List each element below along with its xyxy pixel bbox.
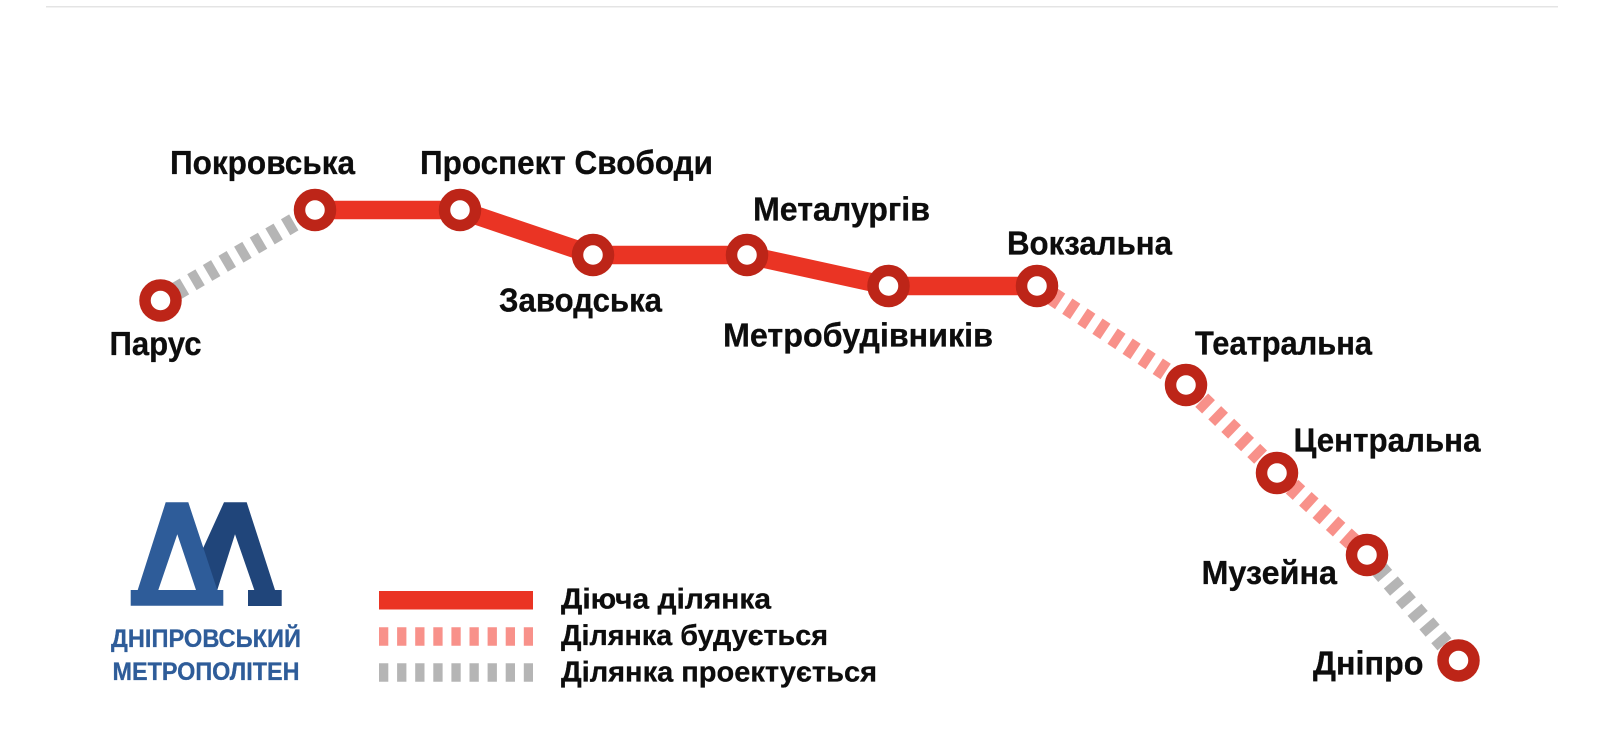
label: Заводська: Заводська	[499, 282, 663, 318]
line: designed section Parus to Pokrovska	[160, 210, 315, 300]
legend: operating section	[379, 584, 772, 616]
metro line map	[145, 194, 1474, 676]
legend: designed section: Ділянка проектується	[561, 656, 877, 688]
icon: letter Л	[200, 502, 282, 606]
label: Парус: Парус	[110, 325, 202, 362]
icon: letter Д	[131, 502, 223, 606]
label: Центральна: Центральна	[1294, 422, 1481, 458]
legend	[379, 584, 877, 688]
line: operating section	[315, 210, 1037, 286]
logo text: ДНІПРОВСЬКИЙ	[111, 623, 301, 653]
line: under construction, Vokzalna to Muzeina	[1037, 286, 1367, 555]
label: Музейна: Музейна	[1202, 554, 1338, 591]
label: Проспект Свободи: Проспект Свободи	[420, 144, 713, 181]
label: Вокзальна: Вокзальна	[1007, 224, 1173, 262]
stations	[145, 194, 1474, 676]
logo text: МЕТРОПОЛІТЕН	[112, 658, 300, 686]
logo: Dnipro metro	[111, 502, 301, 686]
label: Дніпро: Дніпро	[1313, 644, 1424, 682]
line: designed section Muzeina to Dnipro	[1367, 555, 1458, 660]
label: Покровська: Покровська	[170, 144, 356, 181]
legend: section under construction: Ділянка будується	[561, 620, 828, 652]
logo text	[111, 623, 301, 686]
legend: operating section: Діюча ділянка	[561, 584, 772, 616]
station labels	[110, 144, 1481, 682]
label: Метробудівників: Метробудівників	[723, 316, 993, 354]
label: Металургів: Металургів	[753, 190, 930, 228]
label: Театральна: Театральна	[1195, 324, 1373, 362]
